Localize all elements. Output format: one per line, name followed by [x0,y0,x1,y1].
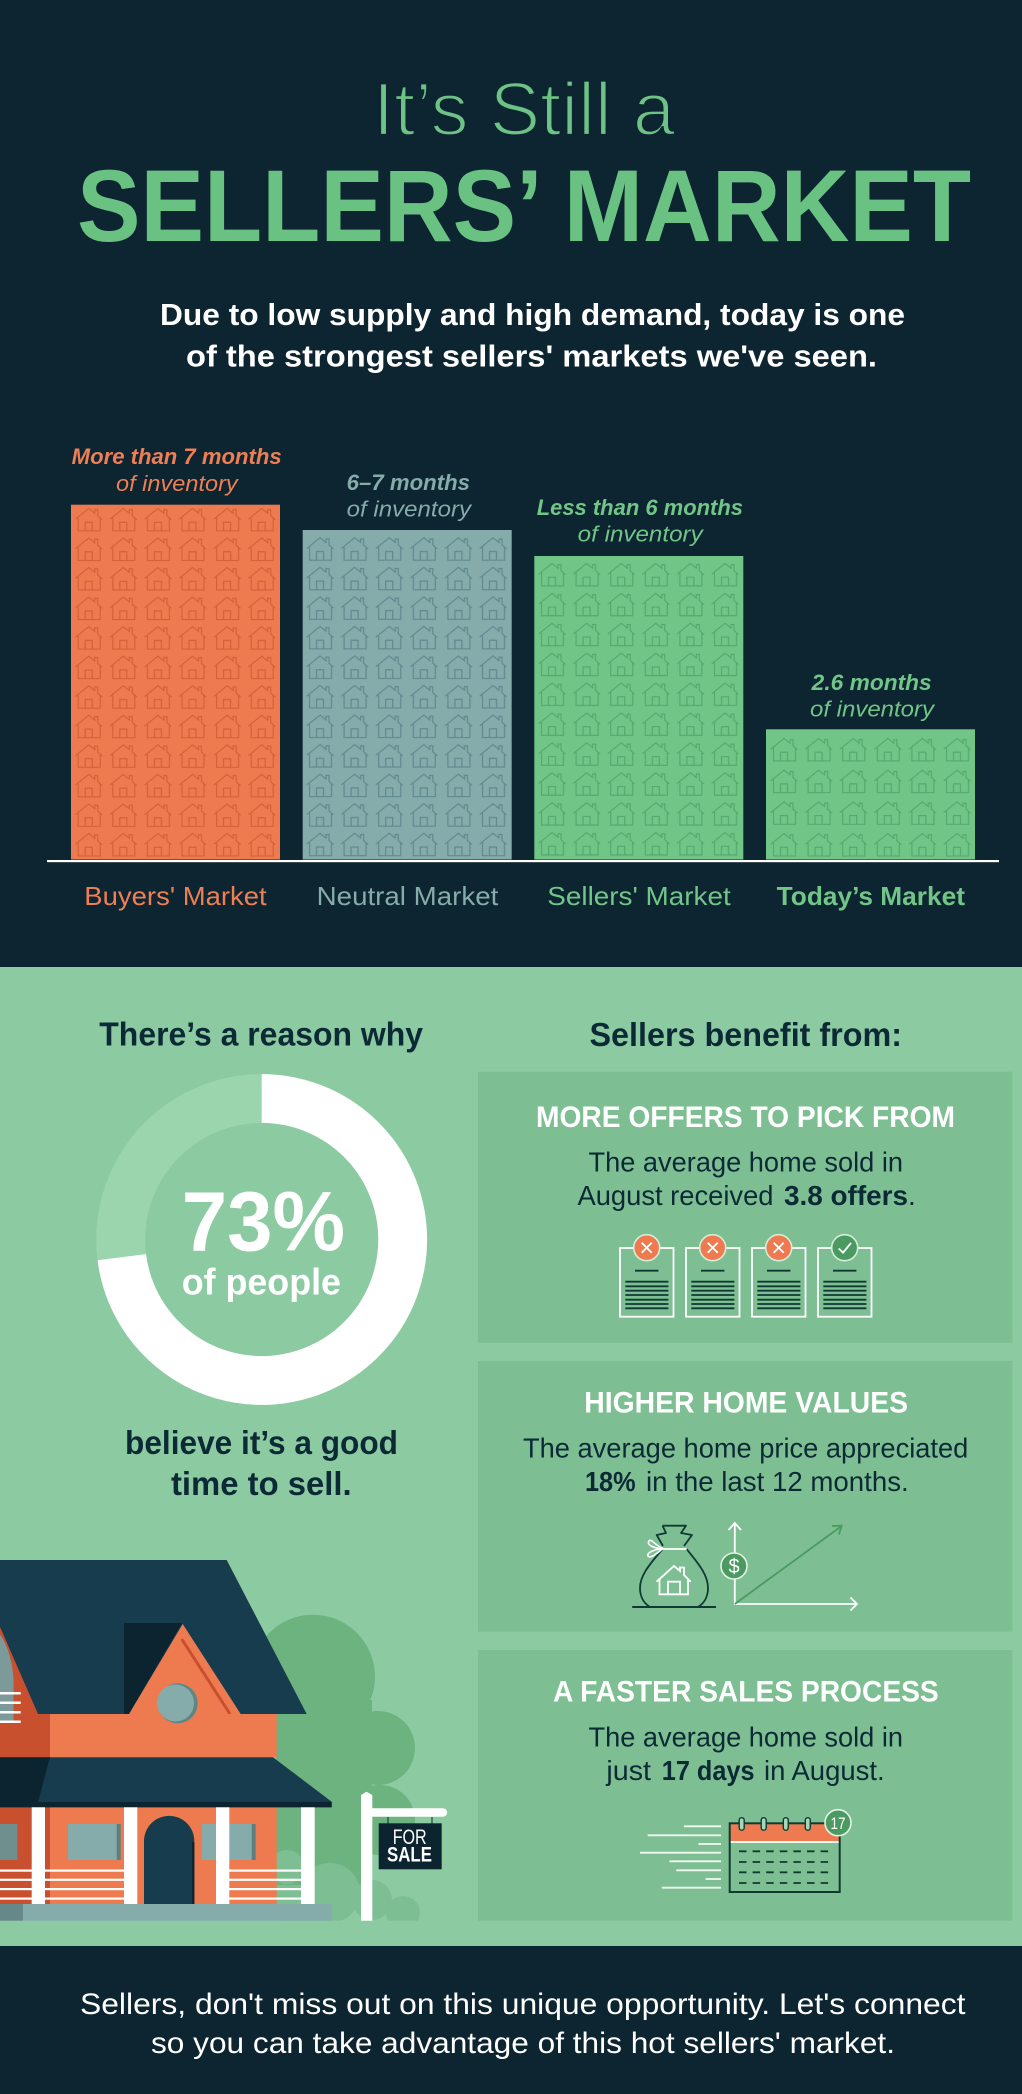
panel heading: A FASTER SALES PROCESS [553,1676,939,1709]
panel text: August received [578,1180,774,1211]
for sale sign [361,1792,447,1921]
panel heading: HIGHER HOME VALUES [584,1387,908,1420]
panel text: 18% [585,1466,636,1497]
bar: sellers' market [534,495,743,911]
panel text: The average home price appreciated [523,1432,968,1463]
footer text: Sellers, don't miss out on this unique opportunity. Let's connect [80,1988,966,2021]
railings [0,1870,301,1900]
icon: speed lines [640,1826,721,1888]
text: believe it's a good time to sell: time to sell. [171,1465,352,1502]
icon: calendar [730,1810,851,1892]
gable [129,1624,241,1714]
intro text: of the strongest sellers' markets we've seen. [186,338,877,374]
panel: higher home values [478,1361,1012,1632]
bar: neutral market [303,470,512,911]
document 1 [620,1235,674,1317]
bar: sellers' market: of inventory [578,522,705,547]
porch roof [0,1757,332,1807]
title [77,67,971,263]
document 4 accepted [818,1235,872,1317]
upper wall band [50,1714,277,1757]
for sale sign: SALE [387,1844,432,1867]
panel text [523,1432,968,1497]
intro text [160,297,905,374]
bar: neutral market: Neutral Market [317,881,499,911]
illustration: tree and bushes [0,1615,480,1946]
foundation [23,1904,332,1921]
bar: buyers' market: More than 7 months [72,444,282,469]
bar chart: months of inventory [47,444,999,911]
panel text: in August. [764,1755,885,1786]
intro text: Due to low supply and high demand, today is one [160,297,905,332]
bar: today's market [766,670,975,911]
document 2 [686,1235,740,1317]
footer text [80,1988,966,2060]
side window [0,1635,14,1722]
heading: there's a reason why: There’s a reason why [99,1016,424,1053]
donut chart: 73 percent: of people [182,1261,341,1302]
bar: sellers' market: Sellers' Market [547,881,732,911]
bar: neutral market: 6–7 months [347,470,470,495]
bar: buyers' market: of inventory [116,471,240,496]
bar: buyers' market: Buyers' Market [84,881,268,911]
panel: footer [0,1946,1022,2094]
lower wall [50,1807,277,1904]
text: believe it's a good time to sell: believe it’s a good [125,1424,398,1461]
panel text: just [605,1755,651,1786]
icon: money bag with house [632,1526,716,1607]
dormer shadow [124,1623,182,1714]
panel text [588,1722,903,1786]
heading: sellers benefit from: Sellers benefit from: [590,1016,902,1053]
footer text: so you can take advantage of this hot sellers' market. [151,2027,895,2060]
icon: price growth graph [721,1523,857,1610]
panel text: in the last 12 months. [646,1466,909,1497]
porch columns [32,1807,315,1904]
icon: offer documents [620,1235,872,1317]
icon: calendar: 17 [830,1814,846,1833]
round window [158,1683,198,1723]
bar: neutral market: of inventory [347,497,473,522]
door [144,1816,194,1904]
title: SELLERS’ MARKET [77,149,971,263]
illustration: house [0,1560,332,1921]
panel text: The average home sold in [588,1722,903,1753]
panel text [578,1147,916,1211]
bar: today's market: Today’s Market [777,881,965,911]
panel text: The average home sold in [588,1147,903,1178]
bar: today's market: of inventory [810,697,936,722]
for sale sign: FOR [393,1826,427,1849]
windows [0,1824,17,1860]
side wall upper [0,1620,50,1757]
panel heading: MORE OFFERS TO PICK FROM [536,1101,955,1134]
panel text: 17 days [662,1755,754,1786]
panel: more offers to pick from [478,1072,1012,1343]
donut chart: 73 percent [121,1098,403,1381]
bar: buyers' market [71,444,282,911]
bar: today's market: 2.6 months [811,670,932,695]
panel text: 3.8 offers [784,1180,908,1211]
text: believe it's a good time to sell [125,1424,398,1502]
title: It’s Still a [373,67,675,151]
bar: sellers' market: Less than 6 months [537,495,743,520]
document 3 [752,1235,806,1317]
icon: price growth graph: $ [728,1556,740,1578]
upper roof [0,1560,307,1714]
panel text: . [908,1180,916,1211]
donut chart: 73 percent: 73% [182,1175,345,1269]
panel: a faster sales process [478,1650,1012,1921]
panel: green section background [0,967,1022,1946]
panel: header background [0,0,1022,967]
